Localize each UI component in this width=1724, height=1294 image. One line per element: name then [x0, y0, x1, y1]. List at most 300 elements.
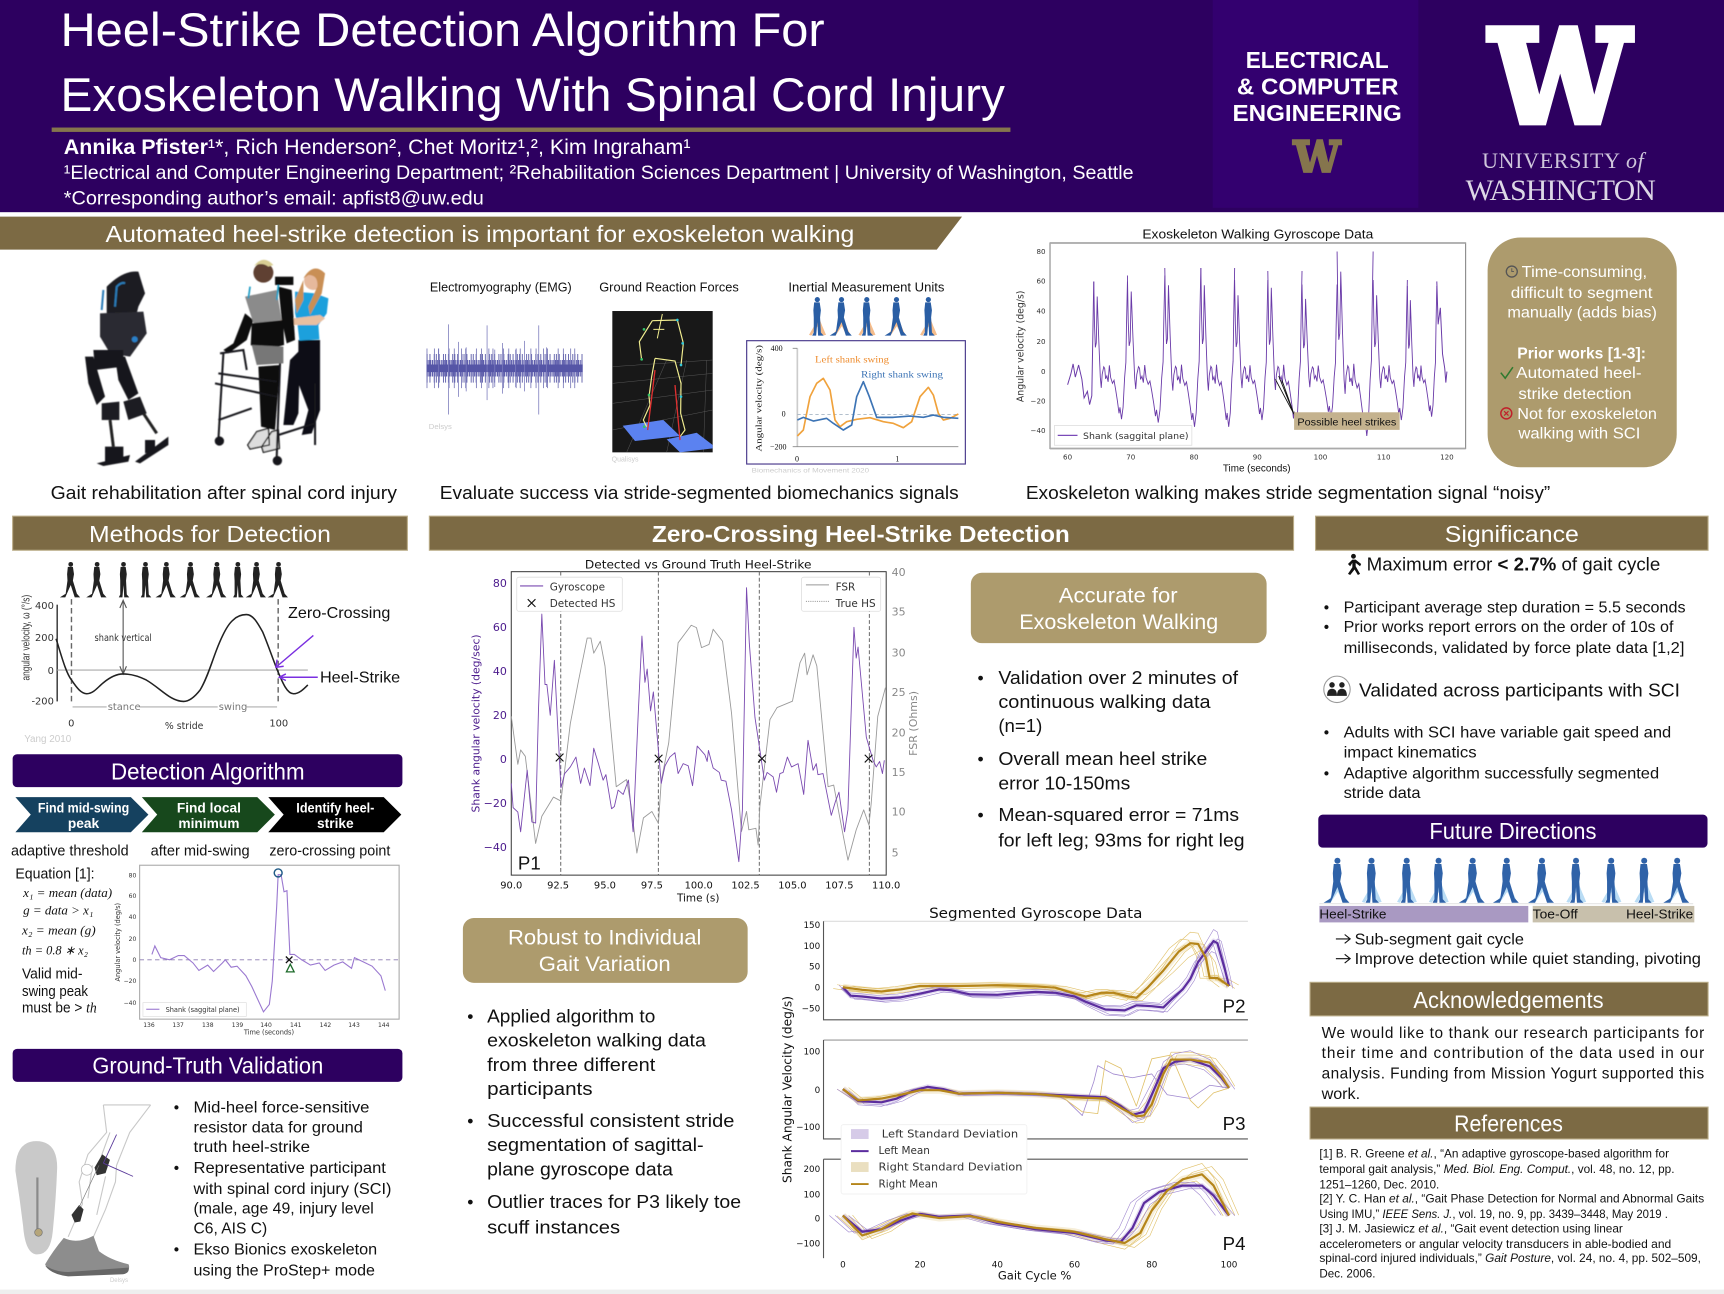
- chart: detected vs ground truth heel-strike: 97.5: [641, 880, 663, 891]
- robustness bullet list: plane gyroscope data: [487, 1158, 674, 1179]
- validation bullet list: [174, 1100, 391, 1279]
- bullet list: adults with SCI: [1324, 725, 1671, 802]
- chart: detected vs ground truth heel-strike: 102.5: [731, 880, 760, 891]
- step sub-labels: after mid-swing: [151, 843, 250, 859]
- legend: FSR and true HS: [802, 577, 881, 611]
- subplot P3: −100: [796, 1123, 820, 1133]
- walking silhouettes: [60, 562, 288, 597]
- bullet list: adults with SCI: Adults with SCI have variable gait speed and: [1344, 725, 1671, 742]
- text: validated across participants: Validated across participants with SCI: [1359, 680, 1680, 700]
- shank angular velocity chart: Angular velocity (deg/s): [753, 345, 763, 452]
- accuracy bullet list: for left leg; 93ms for right leg: [998, 830, 1245, 851]
- legend: Shank (saggital plane): [1083, 432, 1189, 442]
- callout: possible heel strikes: [1275, 376, 1400, 430]
- gait cycle plot: 100: [269, 719, 288, 730]
- zoomed gyroscope chart: 143: [348, 1022, 360, 1029]
- exoskeleton gyroscope chart: Time (seconds): [1223, 464, 1291, 475]
- chart: detected vs ground truth heel-strike: 25: [892, 686, 906, 699]
- gait cycle plot: 0: [48, 666, 54, 677]
- chart: detected vs ground truth heel-strike: 110.0: [872, 880, 900, 891]
- icon: walking person: [1348, 554, 1361, 575]
- robustness bullet list: Successful consistent stride: [487, 1110, 734, 1131]
- gait cycle plot: 0: [68, 719, 74, 730]
- bullet list: adults with SCI: impact kinematics: [1344, 744, 1477, 761]
- subplot P2: 0: [815, 984, 820, 994]
- subplot P2: P2: [1223, 996, 1245, 1017]
- equation block: [15, 866, 112, 1017]
- chart: detected vs ground truth heel-strike: 105.0: [778, 880, 807, 891]
- validation bullet list: •: [174, 1100, 179, 1117]
- legend: left and right traces: [841, 1125, 1027, 1194]
- equation block: swing peak: [22, 984, 89, 1000]
- accuracy bullet list: •: [977, 805, 984, 825]
- signal label: IMU: Inertial Measurement Units: [788, 279, 945, 294]
- subplot P3: 100: [803, 1047, 820, 1057]
- zoomed gyroscope chart: 136: [143, 1022, 155, 1029]
- panel: significance: [1316, 516, 1708, 802]
- shank angular velocity chart: Right shank swing: [861, 369, 943, 380]
- chart: detected vs ground truth heel-strike: 15: [892, 766, 906, 779]
- legend: left and right traces: Left Mean: [878, 1145, 930, 1157]
- bullet list: step duration: •: [1324, 599, 1329, 616]
- subplot P3: 0: [815, 1086, 820, 1096]
- callout: manual segmentation drawbacks: difficult to segment: [1511, 285, 1653, 302]
- zoomed gyroscope chart: 138: [202, 1022, 214, 1029]
- callout: manual segmentation drawbacks: walking with SCI: [1517, 426, 1640, 443]
- callout: robust to individual gait variation: Gait Variation: [539, 953, 671, 976]
- acknowledgement text: their time and contribution of the data used in our: [1322, 1045, 1704, 1062]
- shank angular velocity chart: Biomechanics of Movement 2020: [752, 467, 869, 474]
- exoskeleton gyroscope chart: 60: [1063, 453, 1073, 462]
- validation bullet list: Representative participant: [194, 1160, 386, 1177]
- callout: possible heel strikes: Possible heel strikes: [1297, 417, 1396, 428]
- step sub-labels: adaptive threshold: [11, 843, 129, 859]
- bullet list: step duration: •: [1324, 619, 1329, 636]
- reference list: [2] Y. C. Han et al., “Gait Phase Detection for Normal and Abnormal Gaits: [1319, 1194, 1704, 1206]
- authors and affiliations: Annika Pfister¹*, Rich Henderson², Chet Moritz¹,², Kim Ingraham¹: [64, 136, 691, 159]
- signal label: EMG: Electromyography (EMG): [430, 279, 572, 294]
- equation block: must be > th: [22, 1001, 97, 1017]
- subplot P3: P3: [1223, 1113, 1245, 1134]
- chart: detected vs ground truth heel-strike: 10: [892, 806, 906, 819]
- gait phase bar: [1319, 906, 1694, 922]
- accuracy bullet list: continuous walking data: [998, 691, 1211, 712]
- zoomed gyroscope chart: −20: [124, 978, 136, 985]
- equation block: th = 0.8 ∗ x₂: [22, 943, 89, 957]
- chart: detected vs ground truth heel-strike: 35: [892, 606, 906, 619]
- subplot P4: 200: [803, 1165, 820, 1175]
- subplot P4: −100: [796, 1240, 820, 1250]
- exoskeleton gyroscope chart: 40: [1037, 306, 1046, 315]
- step sub-labels: zero-crossing point: [269, 843, 390, 859]
- label: heel-strike: [279, 670, 400, 687]
- caption: evaluate success: Evaluate success via stride-segmented biomechanics signals: [440, 482, 959, 503]
- authors and affiliations: [64, 136, 1134, 209]
- exoskeleton gyroscope chart: [1016, 227, 1466, 475]
- heading: significance: [1316, 516, 1708, 550]
- reference list: accelerometers or angular velocity transducers in able-bodied and: [1319, 1239, 1671, 1251]
- validation bullet list: •: [174, 1241, 179, 1258]
- robustness bullet list: participants: [487, 1078, 593, 1099]
- shank angular velocity chart: 0: [782, 410, 786, 419]
- step 3 chevron: Identify heel-: [296, 800, 375, 815]
- shank angular velocity chart: 400: [771, 344, 783, 353]
- gait cycle plot: swing: [219, 702, 247, 713]
- callout: manual segmentation drawbacks: manually (adds bias): [1507, 305, 1657, 322]
- robustness bullet list: scuff instances: [487, 1217, 620, 1238]
- exoskeleton gyroscope chart: 120: [1440, 453, 1454, 462]
- subplot P3: [796, 1040, 1248, 1139]
- accuracy bullet list: •: [977, 668, 984, 688]
- icon: participants group: [1324, 676, 1350, 703]
- authors and affiliations: *Corresponding author’s email: apfist8@uw.edu: [64, 187, 484, 209]
- icon: check mark: [1501, 367, 1513, 378]
- step 3 chevron: strike: [317, 816, 354, 831]
- future work list: Improve detection while quiet standing, pivoting: [1355, 951, 1701, 968]
- reference list: temporal gait analysis,” Med. Biol. Eng. Comput., vol. 48, no. 12, pp.: [1319, 1164, 1675, 1176]
- x-axis ticks and label: 100: [1221, 1261, 1237, 1271]
- robustness bullet list: •: [467, 1006, 473, 1026]
- exoskeleton gyroscope chart: 90: [1253, 453, 1262, 462]
- caption: gait rehabilitation: Gait rehabilitation after spinal cord injury: [51, 482, 398, 503]
- zoomed gyroscope chart: Time (seconds): [243, 1029, 294, 1037]
- chart: detected vs ground truth heel-strike: [469, 557, 920, 905]
- subplot P2: 150: [803, 921, 820, 931]
- chart: detected vs ground truth heel-strike: FSR (Ohms): [907, 691, 920, 756]
- validation bullet list: resistor data for ground: [194, 1119, 363, 1136]
- logo: university of washington: UNIVERSITY of: [1482, 148, 1647, 173]
- accuracy bullet list: (n=1): [998, 715, 1042, 736]
- gait phase bar: Heel-Strike: [1626, 907, 1693, 922]
- legend: left and right traces: Left Standard Deviation: [882, 1128, 1018, 1140]
- legend: gyroscope and detected: [517, 577, 622, 611]
- exoskeleton gyroscope chart: Exoskeleton Walking Gyroscope Data: [1142, 227, 1374, 242]
- marker: peak: [274, 869, 282, 877]
- robustness bullet list: Applied algorithm to: [487, 1005, 655, 1026]
- exoskeleton gyroscope chart: 60: [1037, 277, 1046, 286]
- shank angular velocity chart: −200: [770, 442, 787, 451]
- zoomed gyroscope chart: 20: [129, 936, 136, 943]
- exoskeleton gyroscope chart: −40: [1031, 426, 1046, 435]
- illustration: leg with sensors and shoe: [45, 1105, 151, 1284]
- x-axis ticks and label: 40: [992, 1261, 1003, 1271]
- shank angular velocity chart: 1: [895, 455, 899, 464]
- icon: insole with force sensor: [15, 1141, 57, 1254]
- reference list: spinal-cord injured individuals,” Gait Posture, vol. 24, no. 4, pp. 502–509,: [1319, 1253, 1701, 1265]
- robustness bullet list: •: [467, 1192, 473, 1212]
- gait cycle plot: -200: [31, 697, 54, 708]
- callout: manual segmentation drawbacks: Prior works [1-3]:: [1517, 345, 1646, 362]
- bullet list: adults with SCI: •: [1324, 725, 1329, 742]
- zoomed gyroscope chart: 139: [232, 1022, 243, 1029]
- heading: zero-crossing heel-strike detection: Zero-Crossing Heel-Strike Detection: [652, 521, 1070, 547]
- chart: detected vs ground truth heel-strike: Detected vs Ground Truth Heel-Strike: [585, 557, 811, 571]
- subplot P2: −50: [802, 1004, 820, 1014]
- chart: detected vs ground truth heel-strike: −20: [484, 797, 507, 810]
- heading: future directions: [1318, 815, 1708, 848]
- reference list: [1] B. R. Greene et al., “An adaptive gyroscope-based algorithm for: [1319, 1149, 1669, 1161]
- robustness bullet list: from three different: [487, 1054, 656, 1075]
- banner heading: Automated heel-strike detection is important for exoskeleton walking: [106, 221, 854, 247]
- icon: red cross: [1501, 408, 1512, 419]
- label: zero-crossing: Zero-Crossing: [288, 605, 390, 622]
- bullet list: adults with SCI: Adaptive algorithm successfully segmented: [1344, 765, 1659, 782]
- title: Heel-Strike Detection Algorithm For: [60, 4, 825, 57]
- step 2 chevron: [142, 797, 275, 832]
- zoomed gyroscope chart: 140: [260, 1022, 272, 1029]
- bullet list: adults with SCI: stride data: [1344, 785, 1421, 802]
- zoomed gyroscope chart: 137: [172, 1022, 184, 1029]
- logo: university of washington: WASHINGTON: [1466, 175, 1656, 207]
- exoskeleton gyroscope chart: 80: [1190, 453, 1199, 462]
- robustness bullet list: [467, 1005, 741, 1238]
- chart: detected vs ground truth heel-strike: 60: [493, 621, 507, 634]
- step 1 chevron: [15, 797, 148, 832]
- gait cycle plot: [21, 595, 308, 745]
- heading: ground-truth validation: [13, 1049, 402, 1082]
- signal label: ground reaction forces: Ground Reaction Forces: [599, 279, 739, 294]
- heading: acknowledgements: [1310, 982, 1708, 1016]
- x-axis ticks and label: 0: [840, 1261, 846, 1271]
- gait cycle plot: shank vertical: [95, 633, 152, 644]
- exoskeleton gyroscope chart: 70: [1126, 453, 1136, 462]
- subplot P4: [796, 1159, 1248, 1258]
- future work list: [1336, 931, 1701, 968]
- step 3 chevron: [268, 797, 401, 832]
- heading: references: References: [1454, 1110, 1563, 1136]
- reference list: 1251–1260, Dec. 2010.: [1319, 1179, 1439, 1191]
- accuracy bullet list: [977, 667, 1245, 851]
- bullet list: step duration: Participant average step duration = 5.5 seconds: [1344, 599, 1686, 616]
- legend: gyroscope and detected: Detected HS: [550, 598, 616, 610]
- validation bullet list: Ekso Bionics exoskeleton: [194, 1241, 377, 1258]
- icon: clock: [1506, 266, 1517, 277]
- accuracy bullet list: Overall mean heel strike: [998, 748, 1207, 769]
- text: maximum error: Maximum error < 2.7% of gait cycle: [1367, 555, 1660, 575]
- chart: segmented gyroscope data: Shank Angular Velocity (deg/s): [781, 996, 795, 1183]
- gait cycle plot: 200: [35, 633, 54, 644]
- chart: detected vs ground truth heel-strike: Shank angular velocity (deg/sec): [469, 634, 482, 812]
- gait cycle walking figures: [1319, 858, 1693, 904]
- heading: detection algorithm: Detection Algorithm: [111, 758, 305, 784]
- logo: electrical and computer engineering: & COMPUTER: [1237, 74, 1399, 100]
- accuracy bullet list: •: [977, 749, 984, 769]
- future work list: Sub-segment gait cycle: [1355, 931, 1524, 948]
- heading: methods: [13, 516, 407, 550]
- legend: FSR and true HS: FSR: [836, 581, 855, 593]
- EMG signal: [427, 324, 583, 431]
- illustration: leg with sensors and shoe: Delsys: [110, 1278, 128, 1284]
- subplot P2: [802, 921, 1248, 1020]
- exoskeleton gyroscope chart: 0: [1041, 367, 1046, 376]
- subplot P4: P4: [1223, 1233, 1245, 1254]
- panel: detection algorithm: [11, 754, 402, 1037]
- heading: ground-truth validation: Ground-Truth Validation: [92, 1053, 323, 1079]
- validation bullet list: •: [174, 1160, 179, 1177]
- validation bullet list: C6, AIS C): [194, 1221, 267, 1238]
- validation bullet list: truth heel-strike: [194, 1139, 310, 1156]
- validation bullet list: with spinal cord injury (SCI): [192, 1181, 391, 1198]
- title: [52, 4, 1010, 132]
- zoomed gyroscope chart: 141: [290, 1022, 302, 1029]
- reference list: Using IMU,” IEEE Sens. J., vol. 19, no. 9, pp. 3439–3448, May 2019 .: [1319, 1209, 1668, 1221]
- shank angular velocity chart: 0: [795, 455, 799, 464]
- zoomed gyroscope chart: Angular velocity (deg/s): [114, 903, 122, 982]
- chart: detected vs ground truth heel-strike: 92.5: [547, 880, 569, 891]
- chart: detected vs ground truth heel-strike: 107.5: [825, 880, 853, 891]
- zoomed gyroscope chart: 80: [129, 872, 136, 879]
- step 1 chevron: Find mid-swing: [38, 800, 129, 815]
- accuracy bullet list: error 10-150ms: [998, 772, 1130, 793]
- callout: manual segmentation drawbacks: [1488, 237, 1677, 467]
- reference list: [3] J. M. Jasiewicz et al., “Gait event detection using linear: [1319, 1223, 1623, 1235]
- chart: detected vs ground truth heel-strike: 40: [892, 566, 906, 579]
- bullet list: adults with SCI: •: [1324, 765, 1329, 782]
- zoomed gyroscope chart: −40: [124, 1000, 136, 1007]
- reference list: [1319, 1149, 1704, 1281]
- legend: FSR and true HS: True HS: [835, 598, 876, 610]
- subplot P4: 100: [803, 1190, 820, 1200]
- chart: detected vs ground truth heel-strike: P1: [518, 853, 541, 874]
- motion capture skeleton image: Qualisys: [612, 457, 639, 464]
- callout: robust to individual gait variation: Robust to Individual: [508, 926, 701, 949]
- bullet list: step duration: [1324, 599, 1686, 657]
- chart: segmented gyroscope data: [781, 906, 1248, 1283]
- zoomed gyroscope chart: 142: [320, 1022, 331, 1029]
- accuracy bullet list: Validation over 2 minutes of: [998, 667, 1239, 688]
- exoskeleton gyroscope chart: 100: [1314, 453, 1328, 462]
- acknowledgement text: [1321, 1025, 1705, 1103]
- equation block: Equation [1]:: [15, 866, 95, 882]
- x-axis ticks and label: 80: [1146, 1261, 1157, 1271]
- photo: robotic exoskeleton: [85, 272, 168, 466]
- gait cycle plot: 400: [35, 601, 54, 612]
- chart: detected vs ground truth heel-strike: Time (s): [676, 893, 719, 905]
- legend: left and right traces: Right Mean: [878, 1178, 938, 1190]
- chart: detected vs ground truth heel-strike: 0: [500, 753, 507, 766]
- zoomed gyroscope chart: 40: [129, 914, 136, 921]
- callout: manual segmentation drawbacks: strike detection: [1518, 386, 1632, 403]
- accuracy bullet list: Mean-squared error = 71ms: [998, 804, 1239, 825]
- legend: [1054, 425, 1192, 445]
- heading: references: [1310, 1107, 1708, 1139]
- equation block: x₂ = mean (g): [21, 923, 96, 937]
- chart: segmented gyroscope data: Segmented Gyroscope Data: [929, 906, 1142, 922]
- callout: accurate for exoskeleton walking: Accurate for: [1059, 584, 1178, 607]
- callout: manual segmentation drawbacks: Automated heel-: [1516, 365, 1642, 382]
- heading: methods: Methods for Detection: [89, 521, 331, 547]
- shank angular velocity chart: Left shank swing: [815, 355, 889, 366]
- robustness bullet list: exoskeleton walking data: [487, 1030, 707, 1051]
- heading: detection algorithm: [13, 754, 402, 787]
- label: heel-strike: Heel-Strike: [320, 670, 400, 687]
- validation bullet list: Mid-heel force-sensitive: [194, 1100, 370, 1117]
- callout: manual segmentation drawbacks: Not for exoskeleton: [1517, 406, 1657, 423]
- step sub-labels: [11, 843, 390, 859]
- banner heading: [0, 217, 962, 250]
- authors and affiliations: ¹Electrical and Computer Engineering Department; ²Rehabilitation Sciences Department | University of Washington, Seattle: [64, 162, 1134, 184]
- equation block: Valid mid-: [22, 966, 83, 982]
- chart: detected vs ground truth heel-strike: 95.0: [594, 880, 616, 891]
- robustness bullet list: •: [467, 1111, 473, 1131]
- panel: methods for detection: [13, 516, 407, 745]
- gait cycle plot: Yang 2010: [24, 734, 72, 745]
- shank angular velocity chart: [747, 341, 965, 474]
- heading: zero-crossing heel-strike detection: [429, 516, 1294, 550]
- gait phase bar: Heel-Strike: [1319, 907, 1386, 922]
- bullet list: step duration: Prior works report errors on the order of 10s of: [1344, 619, 1674, 636]
- marker: local minimum: [286, 964, 294, 972]
- exoskeleton gyroscope chart: 80: [1037, 247, 1046, 256]
- chart: detected vs ground truth heel-strike: 100.0: [685, 880, 713, 891]
- subplot P4: 0: [815, 1214, 820, 1224]
- zoomed gyroscope chart: 144: [378, 1022, 390, 1029]
- exoskeleton gyroscope chart: 20: [1037, 337, 1046, 346]
- chart: detected vs ground truth heel-strike: −40: [484, 841, 507, 854]
- acknowledgement text: analysis. Funding from Mission Yogurt supported this: [1322, 1066, 1705, 1083]
- heading: future directions: Future Directions: [1429, 818, 1596, 844]
- subplot P2: 100: [803, 942, 820, 952]
- subplot P2: 50: [809, 963, 820, 973]
- equation block: g = data > x₁: [23, 904, 93, 918]
- photo: participant with walker and therapist: [215, 260, 328, 465]
- logo: electrical and computer engineering: [1213, 0, 1418, 208]
- heading: significance: Significance: [1445, 521, 1579, 547]
- EMG signal: Delsys: [429, 422, 452, 431]
- x-axis ticks and label: 20: [914, 1261, 926, 1271]
- acknowledgement text: We would like to thank our research participants for: [1322, 1025, 1704, 1042]
- chart: detected vs ground truth heel-strike: 30: [892, 646, 906, 659]
- exoskeleton gyroscope chart: 110: [1377, 453, 1391, 462]
- x-axis ticks and label: [840, 1261, 1237, 1283]
- zoomed gyroscope chart: Shank (saggital plane): [166, 1006, 240, 1014]
- gait phase bar: Toe-Off: [1533, 907, 1578, 922]
- x-axis ticks and label: Gait Cycle %: [998, 1269, 1071, 1283]
- step 2 chevron: minimum: [178, 816, 239, 831]
- exoskeleton gyroscope chart: −20: [1031, 396, 1046, 405]
- caption: noisy signal: Exoskeleton walking makes stride segmentation signal “noisy”: [1026, 482, 1550, 503]
- gait cycle plot: angular velocity, ω (°/s): [21, 595, 33, 681]
- reference list: Dec. 2006.: [1319, 1269, 1375, 1281]
- gait cycle plot: stance: [108, 702, 141, 713]
- exoskeleton gyroscope chart: Angular velocity (deg/s): [1016, 291, 1027, 402]
- acknowledgement text: work.: [1321, 1086, 1360, 1103]
- panel: future directions: [1318, 815, 1708, 968]
- callout: accurate for exoskeleton walking: [971, 573, 1267, 643]
- callout: robust to individual gait variation: [463, 918, 748, 983]
- step 2 chevron: Find local: [177, 800, 241, 815]
- step 1 chevron: peak: [68, 816, 100, 831]
- legend: left and right traces: Right Standard Deviation: [878, 1161, 1023, 1173]
- x-axis ticks and label: 60: [1069, 1261, 1080, 1271]
- chart: detected vs ground truth heel-strike: 20: [493, 709, 507, 722]
- callout: manual segmentation drawbacks: Time-consuming,: [1522, 264, 1647, 281]
- robustness bullet list: Outlier traces for P3 likely toe: [487, 1191, 741, 1212]
- legend: gyroscope and detected: Gyroscope: [550, 581, 605, 593]
- chart: detected vs ground truth heel-strike: 90.0: [500, 880, 522, 891]
- robustness bullet list: segmentation of sagittal-: [487, 1134, 704, 1155]
- panel: acknowledgements: [1310, 982, 1708, 1103]
- chart: detected vs ground truth heel-strike: 80: [493, 577, 507, 590]
- logo: university of washington: [1466, 25, 1656, 207]
- logo: electrical and computer engineering: ELECTRICAL: [1246, 47, 1389, 73]
- chart: detected vs ground truth heel-strike: 20: [892, 727, 906, 740]
- chart: detected vs ground truth heel-strike: 5: [892, 846, 899, 859]
- bullet list: step duration: milliseconds, validated by force plate data [1,2]: [1344, 640, 1684, 657]
- zoomed gyroscope chart: [114, 865, 399, 1037]
- heading: acknowledgements: Acknowledgements: [1413, 987, 1604, 1013]
- header band: [0, 0, 1724, 212]
